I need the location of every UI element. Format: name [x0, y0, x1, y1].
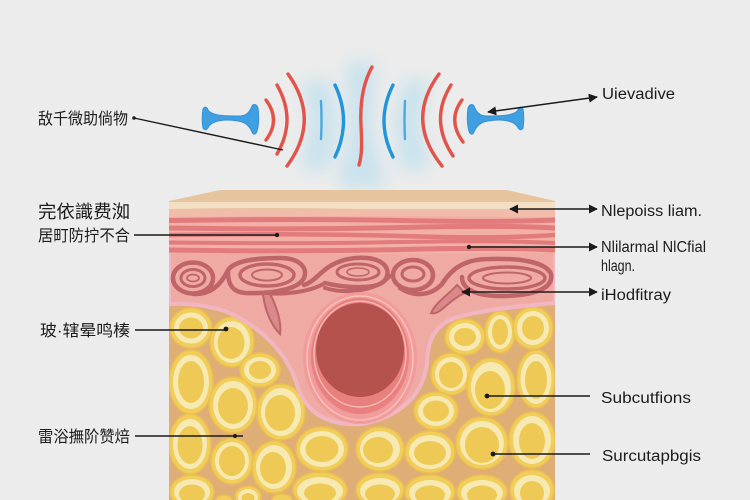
icon: right transducer: [467, 105, 524, 134]
stratum corneum top surface: [169, 190, 555, 210]
coiled sweat glands: [173, 258, 551, 334]
label: left 1: 敌千微助倘物: [38, 110, 128, 128]
label: right 1: Uievadive: [602, 86, 675, 103]
sound waves: [266, 67, 463, 166]
label: right 2: Nlepoiss liam.: [601, 203, 702, 220]
labels left: [38, 110, 130, 446]
label: right 4: iHodfitray: [601, 287, 671, 304]
label: left 2: 完依識费洳: [38, 202, 130, 222]
label: right 3 line 2: hlagn.: [601, 258, 635, 275]
leader lines: [132, 97, 597, 456]
labels right: [601, 86, 706, 465]
label: left 5: 雷浴撫阶赞焙: [38, 428, 130, 446]
ultrasound glow: [300, 62, 430, 188]
skin cross-section block: [169, 190, 555, 500]
epidermis pale band: [169, 202, 555, 209]
gland duct left: [263, 294, 280, 334]
dermal striped layers: [169, 216, 555, 254]
dermis layer: [169, 253, 555, 426]
fat cells: [169, 307, 555, 500]
label: right 6: Surcutapbgis: [602, 448, 701, 465]
label: right 5: Subcutfions: [601, 390, 691, 407]
gland duct right: [431, 285, 465, 313]
icon: left transducer: [202, 105, 259, 134]
blood vessel: [303, 292, 417, 424]
label: right 3: Nlilarmal NlCfial: [601, 239, 706, 256]
subcutaneous fat background: [169, 295, 555, 500]
label: left 3: 居町防拧不合: [38, 227, 130, 245]
label: left 4: 玻·辖晕鸣楱: [40, 322, 130, 340]
pale pink band: [169, 209, 555, 217]
